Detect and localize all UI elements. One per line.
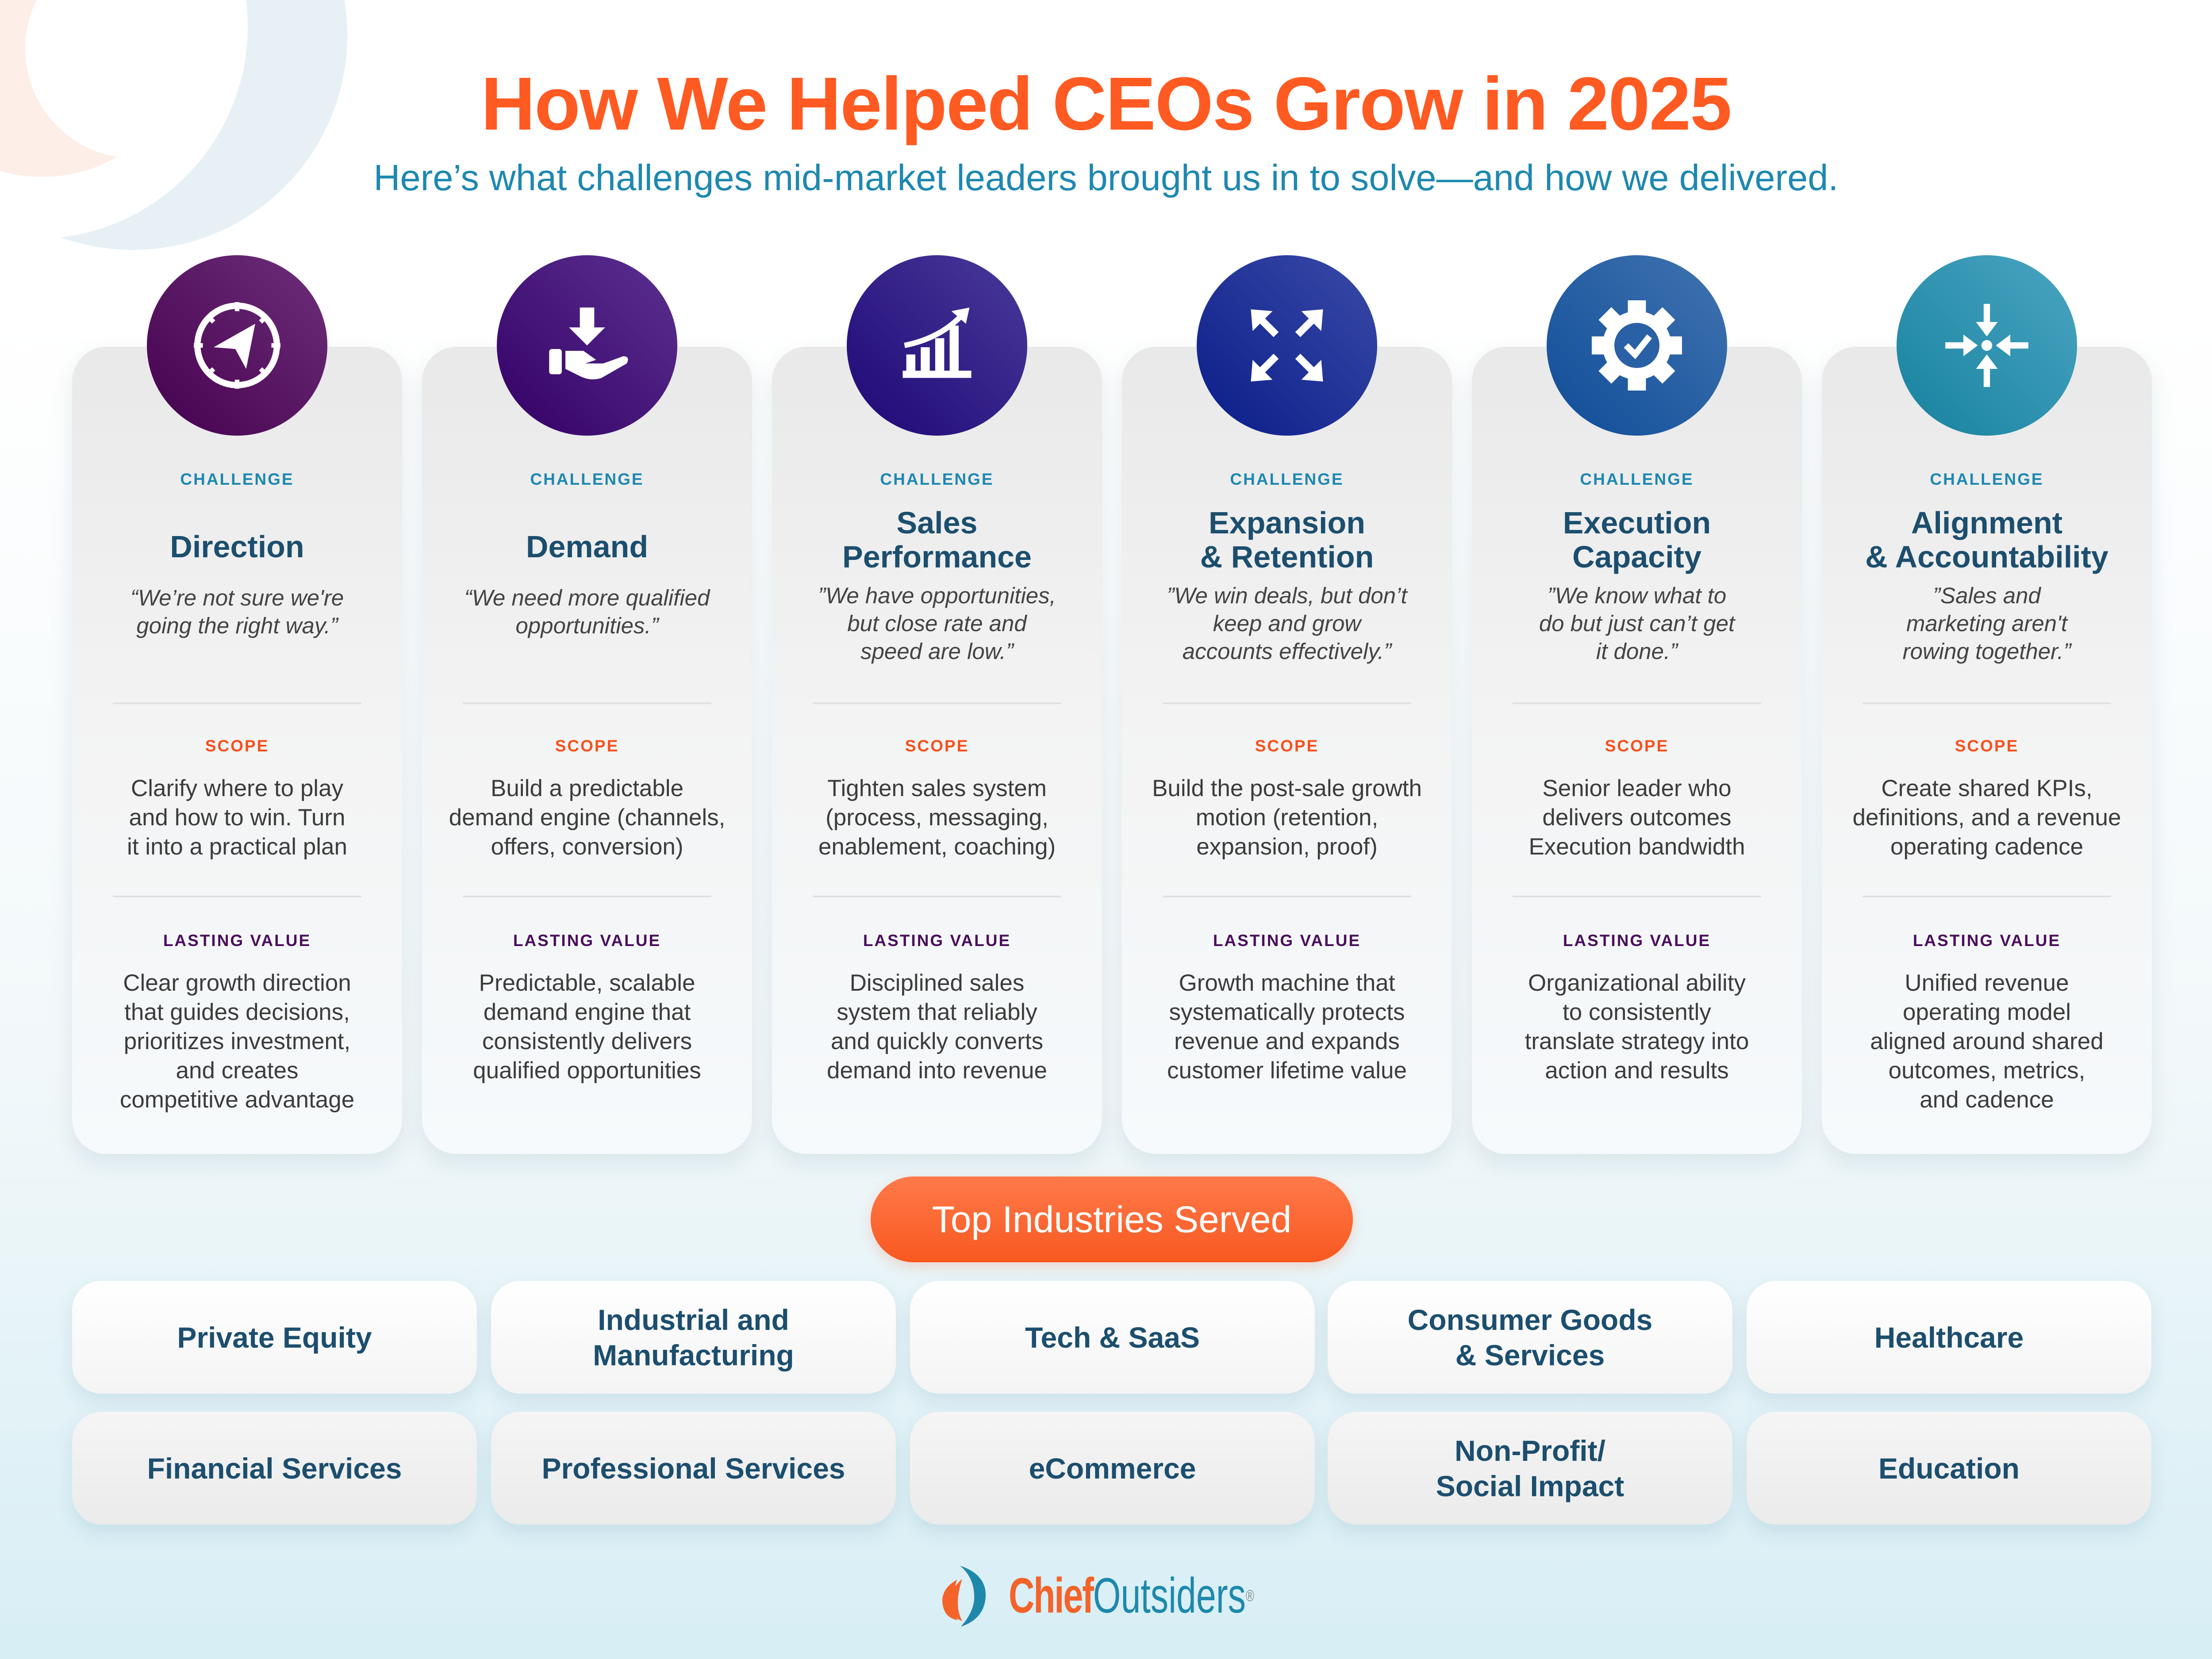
tile: Private Equity xyxy=(72,1281,477,1394)
panel: Sales Performance: LASTING VALUE xyxy=(863,931,1011,950)
panel: Execution Capacity: Execution bandwidth xyxy=(1528,834,1745,860)
panel: Execution Capacity: do but just can’t get xyxy=(1539,611,1735,636)
panel: Direction xyxy=(72,347,402,1154)
panel: Expansion & Retention: Build the post-sale growth xyxy=(1152,775,1422,801)
panel: Sales Performance: and quickly converts xyxy=(831,1028,1043,1054)
panel: Direction: and creates xyxy=(176,1057,298,1084)
panel: Sales Performance: ”We have opportunities, xyxy=(818,583,1056,608)
panel: Expansion & Retention: Expansion xyxy=(1209,506,1365,540)
panel: Execution Capacity: ”We know what to xyxy=(1548,583,1726,608)
panel: Execution Capacity: action and results xyxy=(1545,1057,1729,1084)
panel: Execution Capacity xyxy=(1472,347,1802,1154)
panel: Sales Performance: system that reliably xyxy=(837,999,1037,1025)
panel: Expansion & Retention: motion (retention, xyxy=(1196,805,1378,831)
decorative corner shapes xyxy=(0,0,354,265)
tile: Professional Services xyxy=(491,1412,896,1525)
panel: Direction: Direction xyxy=(170,529,304,564)
tile: Tech & SaaS: Tech & SaaS xyxy=(1025,1321,1200,1353)
panel: Alignment & Accountability: aligned around shared xyxy=(1870,1028,2104,1054)
panel: Expansion & Retention: accounts effectively.” xyxy=(1183,639,1391,664)
logo: Chief Outsiders: ChiefOutsiders® xyxy=(1009,1568,1254,1623)
panel: Expansion & Retention: revenue and expands xyxy=(1174,1028,1400,1054)
panel: Alignment & Accountability: Unified revenue xyxy=(1905,970,2069,996)
icon: growth chart xyxy=(847,255,1027,436)
panel: Sales Performance: demand into revenue xyxy=(827,1057,1047,1084)
panel: Direction: CHALLENGE xyxy=(180,470,294,488)
panel: Alignment & Accountability: rowing together.” xyxy=(1903,639,2071,664)
logo: Chief Outsiders xyxy=(938,1561,1283,1628)
panel: Demand: demand engine that xyxy=(484,999,691,1025)
tile: Non-Profit/Social Impact xyxy=(1328,1412,1732,1525)
panel: Alignment & Accountability: marketing aren't xyxy=(1906,611,2067,636)
panel: Direction: “We’re not sure we're xyxy=(131,585,344,610)
panel: Sales Performance: enablement, coaching) xyxy=(818,834,1056,860)
panel: Direction: LASTING VALUE xyxy=(163,931,311,950)
tile: Financial Services: Financial Services xyxy=(147,1452,402,1484)
panel: Demand xyxy=(422,347,752,1154)
panel: Alignment & Accountability: definitions, and a revenue xyxy=(1853,805,2121,831)
tile: Private Equity: Private Equity xyxy=(177,1321,372,1353)
tile: Tech & SaaS xyxy=(910,1281,1315,1394)
panel: Sales Performance: Performance xyxy=(842,540,1032,574)
tile: Professional Services: Professional Services xyxy=(541,1452,845,1484)
panel: Execution Capacity: Senior leader who xyxy=(1542,775,1732,801)
tile: Education xyxy=(1747,1412,2151,1525)
panel: Demand: “We need more qualified xyxy=(465,585,710,610)
panel: Sales Performance: Disciplined sales xyxy=(850,970,1024,996)
tile: Healthcare: Healthcare xyxy=(1874,1321,2024,1353)
panel: Alignment & Accountability xyxy=(1822,347,2152,1154)
panel: Demand: Build a predictable xyxy=(491,775,684,801)
tile: Industrial and Manufacturing: Industrial and xyxy=(598,1303,789,1336)
panel: Alignment & Accountability: Create shared KPIs, xyxy=(1881,775,2093,801)
subtitle: Here’s what challenges mid-market leaders brought us in to solve—and how we delivered. xyxy=(374,157,1838,198)
panel: Alignment & Accountability: CHALLENGE xyxy=(1930,470,2044,488)
tile: Non-Profit/Social Impact: Social Impact xyxy=(1436,1469,1624,1502)
panel: Expansion & Retention: systematically protects xyxy=(1169,999,1405,1025)
panel: Alignment & Accountability: Alignment xyxy=(1911,506,2062,540)
panel: Sales Performance: but close rate and xyxy=(847,611,1027,636)
tile: Consumer Goods & Services xyxy=(1328,1281,1732,1394)
tile: Consumer Goods & Services: Consumer Goods xyxy=(1408,1303,1652,1336)
icon: converging arrows xyxy=(1897,255,2077,436)
panel: Direction: and how to win. Turn xyxy=(129,805,346,831)
panel: Expansion & Retention: & Retention xyxy=(1200,540,1374,574)
panel: Execution Capacity: to consistently xyxy=(1563,999,1711,1025)
panel: Execution Capacity: it done.” xyxy=(1596,639,1678,664)
panel: Demand: qualified opportunities xyxy=(473,1057,701,1084)
panel: Alignment & Accountability: operating cadence xyxy=(1890,834,2083,860)
panel: Demand: SCOPE xyxy=(555,737,619,755)
panel: Sales Performance xyxy=(772,347,1102,1154)
panel: Expansion & Retention: keep and grow xyxy=(1213,611,1361,636)
panel: Alignment & Accountability: outcomes, metrics, xyxy=(1889,1057,2085,1084)
panel: Demand: opportunities.” xyxy=(515,613,659,638)
panel: Alignment & Accountability: operating model xyxy=(1903,999,2071,1025)
panel: Direction: it into a practical plan xyxy=(127,834,347,860)
panel: Alignment & Accountability: & Accountability xyxy=(1865,540,2108,574)
tile: Industrial and Manufacturing: Manufacturing xyxy=(593,1338,794,1371)
panel: Sales Performance: speed are low.” xyxy=(860,639,1014,664)
panel: Execution Capacity: Execution xyxy=(1563,506,1711,540)
panel: Sales Performance: (process, messaging, xyxy=(826,805,1048,831)
panel: Expansion & Retention: ”We win deals, but don’t xyxy=(1167,583,1407,608)
panel: Alignment & Accountability: LASTING VALUE xyxy=(1913,931,2061,950)
panel: Execution Capacity: Capacity xyxy=(1572,540,1701,574)
panel: Execution Capacity: SCOPE xyxy=(1605,737,1669,755)
panel: Direction: going the right way.” xyxy=(136,613,338,638)
icon: gear check xyxy=(1547,255,1727,436)
panel: Direction: SCOPE xyxy=(205,737,269,755)
panel: Direction: that guides decisions, xyxy=(124,999,350,1025)
heading pill: Top Industries Served xyxy=(871,1176,1353,1262)
panel: Direction: competitive advantage xyxy=(120,1087,354,1113)
tile: Education: Education xyxy=(1878,1452,2020,1484)
panel: Execution Capacity: translate strategy into xyxy=(1525,1028,1749,1054)
panel: Demand: Demand xyxy=(526,529,648,564)
tile: Non-Profit/Social Impact: Non-Profit/ xyxy=(1455,1434,1605,1467)
panel: Demand: demand engine (channels, xyxy=(449,805,725,831)
panel: Execution Capacity: Organizational ability xyxy=(1528,970,1746,996)
panel: Expansion & Retention: LASTING VALUE xyxy=(1213,931,1361,950)
panel: Sales Performance: CHALLENGE xyxy=(880,470,994,488)
panel: Demand: Predictable, scalable xyxy=(479,970,695,996)
tile: eCommerce: eCommerce xyxy=(1029,1452,1196,1484)
tile: Healthcare xyxy=(1747,1281,2151,1394)
panel: Expansion & Retention: CHALLENGE xyxy=(1230,470,1344,488)
panel: Direction: Clarify where to play xyxy=(131,775,343,801)
panel: Expansion & Retention: customer lifetime value xyxy=(1167,1057,1407,1084)
icon: demand hand xyxy=(497,255,677,436)
tile: Consumer Goods & Services: & Services xyxy=(1455,1338,1605,1371)
panel: Expansion & Retention: expansion, proof) xyxy=(1196,834,1378,860)
panel: Direction: prioritizes investment, xyxy=(124,1028,350,1054)
panel: Execution Capacity: LASTING VALUE xyxy=(1563,931,1711,950)
icon: compass xyxy=(147,255,327,436)
tile: Financial Services xyxy=(72,1412,477,1525)
panel: Demand: LASTING VALUE xyxy=(513,931,661,950)
heading pill: Top Industries Served: Top Industries Served xyxy=(932,1199,1291,1240)
panel: Expansion & Retention: Growth machine that xyxy=(1179,970,1395,996)
panel: Sales Performance: Tighten sales system xyxy=(827,775,1047,801)
panel: Alignment & Accountability: ”Sales and xyxy=(1933,583,2041,608)
panel: Demand: CHALLENGE xyxy=(530,470,644,488)
panel: Expansion & Retention: SCOPE xyxy=(1255,737,1319,755)
panel: Execution Capacity: delivers outcomes xyxy=(1542,805,1732,831)
tile: Industrial and Manufacturing xyxy=(491,1281,896,1394)
panel: Sales Performance: SCOPE xyxy=(905,737,969,755)
panel: Direction: Clear growth direction xyxy=(123,970,351,996)
panel: Execution Capacity: CHALLENGE xyxy=(1580,470,1694,488)
panel: Demand: offers, conversion) xyxy=(491,834,683,860)
icon: expand arrows xyxy=(1197,255,1377,436)
panel: Expansion & Retention xyxy=(1122,347,1452,1154)
tile: eCommerce xyxy=(910,1412,1315,1525)
title: How We Helped CEOs Grow in 2025 xyxy=(481,62,1731,146)
panel: Alignment & Accountability: SCOPE xyxy=(1955,737,2019,755)
panel: Alignment & Accountability: and cadence xyxy=(1920,1087,2054,1113)
panel: Sales Performance: Sales xyxy=(897,506,977,540)
panel: Demand: consistently delivers xyxy=(482,1028,692,1054)
